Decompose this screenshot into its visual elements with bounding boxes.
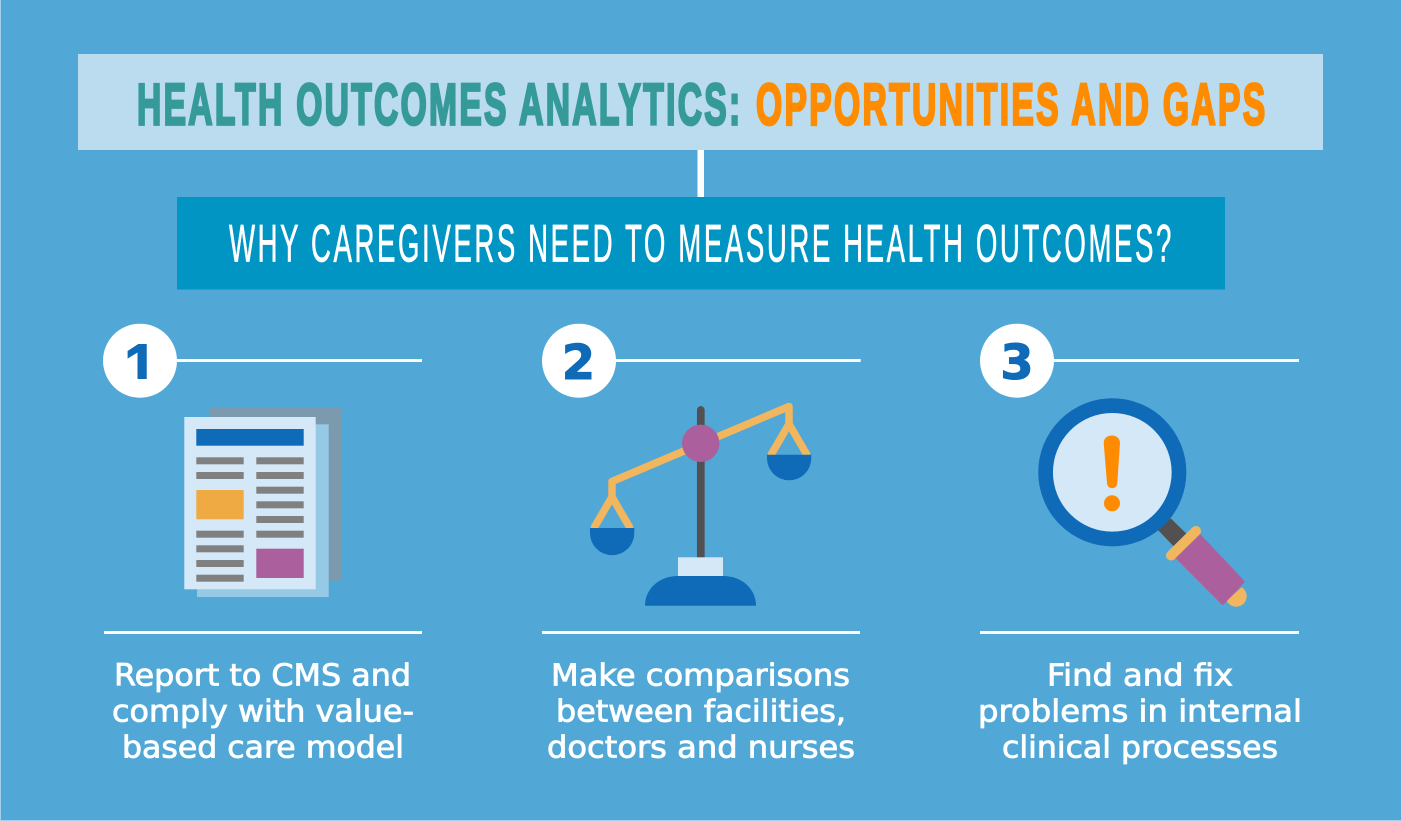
icon: magnifying glass with exclamation mark: [1046, 406, 1247, 607]
caption 3: Find and fix: [1047, 658, 1233, 694]
caption 1: based care model: [122, 730, 404, 766]
number badge 1: [103, 324, 422, 399]
panel 2: scales: [542, 324, 861, 766]
caption 2: [547, 658, 855, 766]
caption 3: clinical processes: [1002, 730, 1278, 766]
caption 2: between facilities,: [556, 694, 846, 730]
title: teal part: HEALTH OUTCOMES ANALYTICS:: [137, 73, 742, 138]
caption 2: doctors and nurses: [547, 730, 855, 766]
number badge 2: [542, 324, 861, 398]
caption 1: [112, 658, 414, 766]
subtitle banner: [177, 197, 1225, 290]
connector between title and subtitle: [698, 149, 704, 198]
number badge 2: 2: [562, 335, 595, 391]
caption 2: Make comparisons: [551, 658, 850, 694]
number badge 3: [980, 324, 1299, 398]
number badge 1: 1: [124, 332, 157, 399]
title banner: [78, 54, 1323, 150]
panel 1: report: [103, 324, 422, 766]
caption 3: [978, 658, 1302, 766]
number badge 3: 3: [1000, 335, 1034, 391]
icon: balance scales: [590, 406, 811, 606]
caption 3: problems in internal: [978, 694, 1302, 730]
caption 1: Report to CMS and: [114, 658, 411, 694]
panel 3: magnifier: [978, 324, 1302, 766]
caption 1: comply with value-: [112, 694, 414, 730]
icon: newspaper report: [184, 408, 341, 597]
